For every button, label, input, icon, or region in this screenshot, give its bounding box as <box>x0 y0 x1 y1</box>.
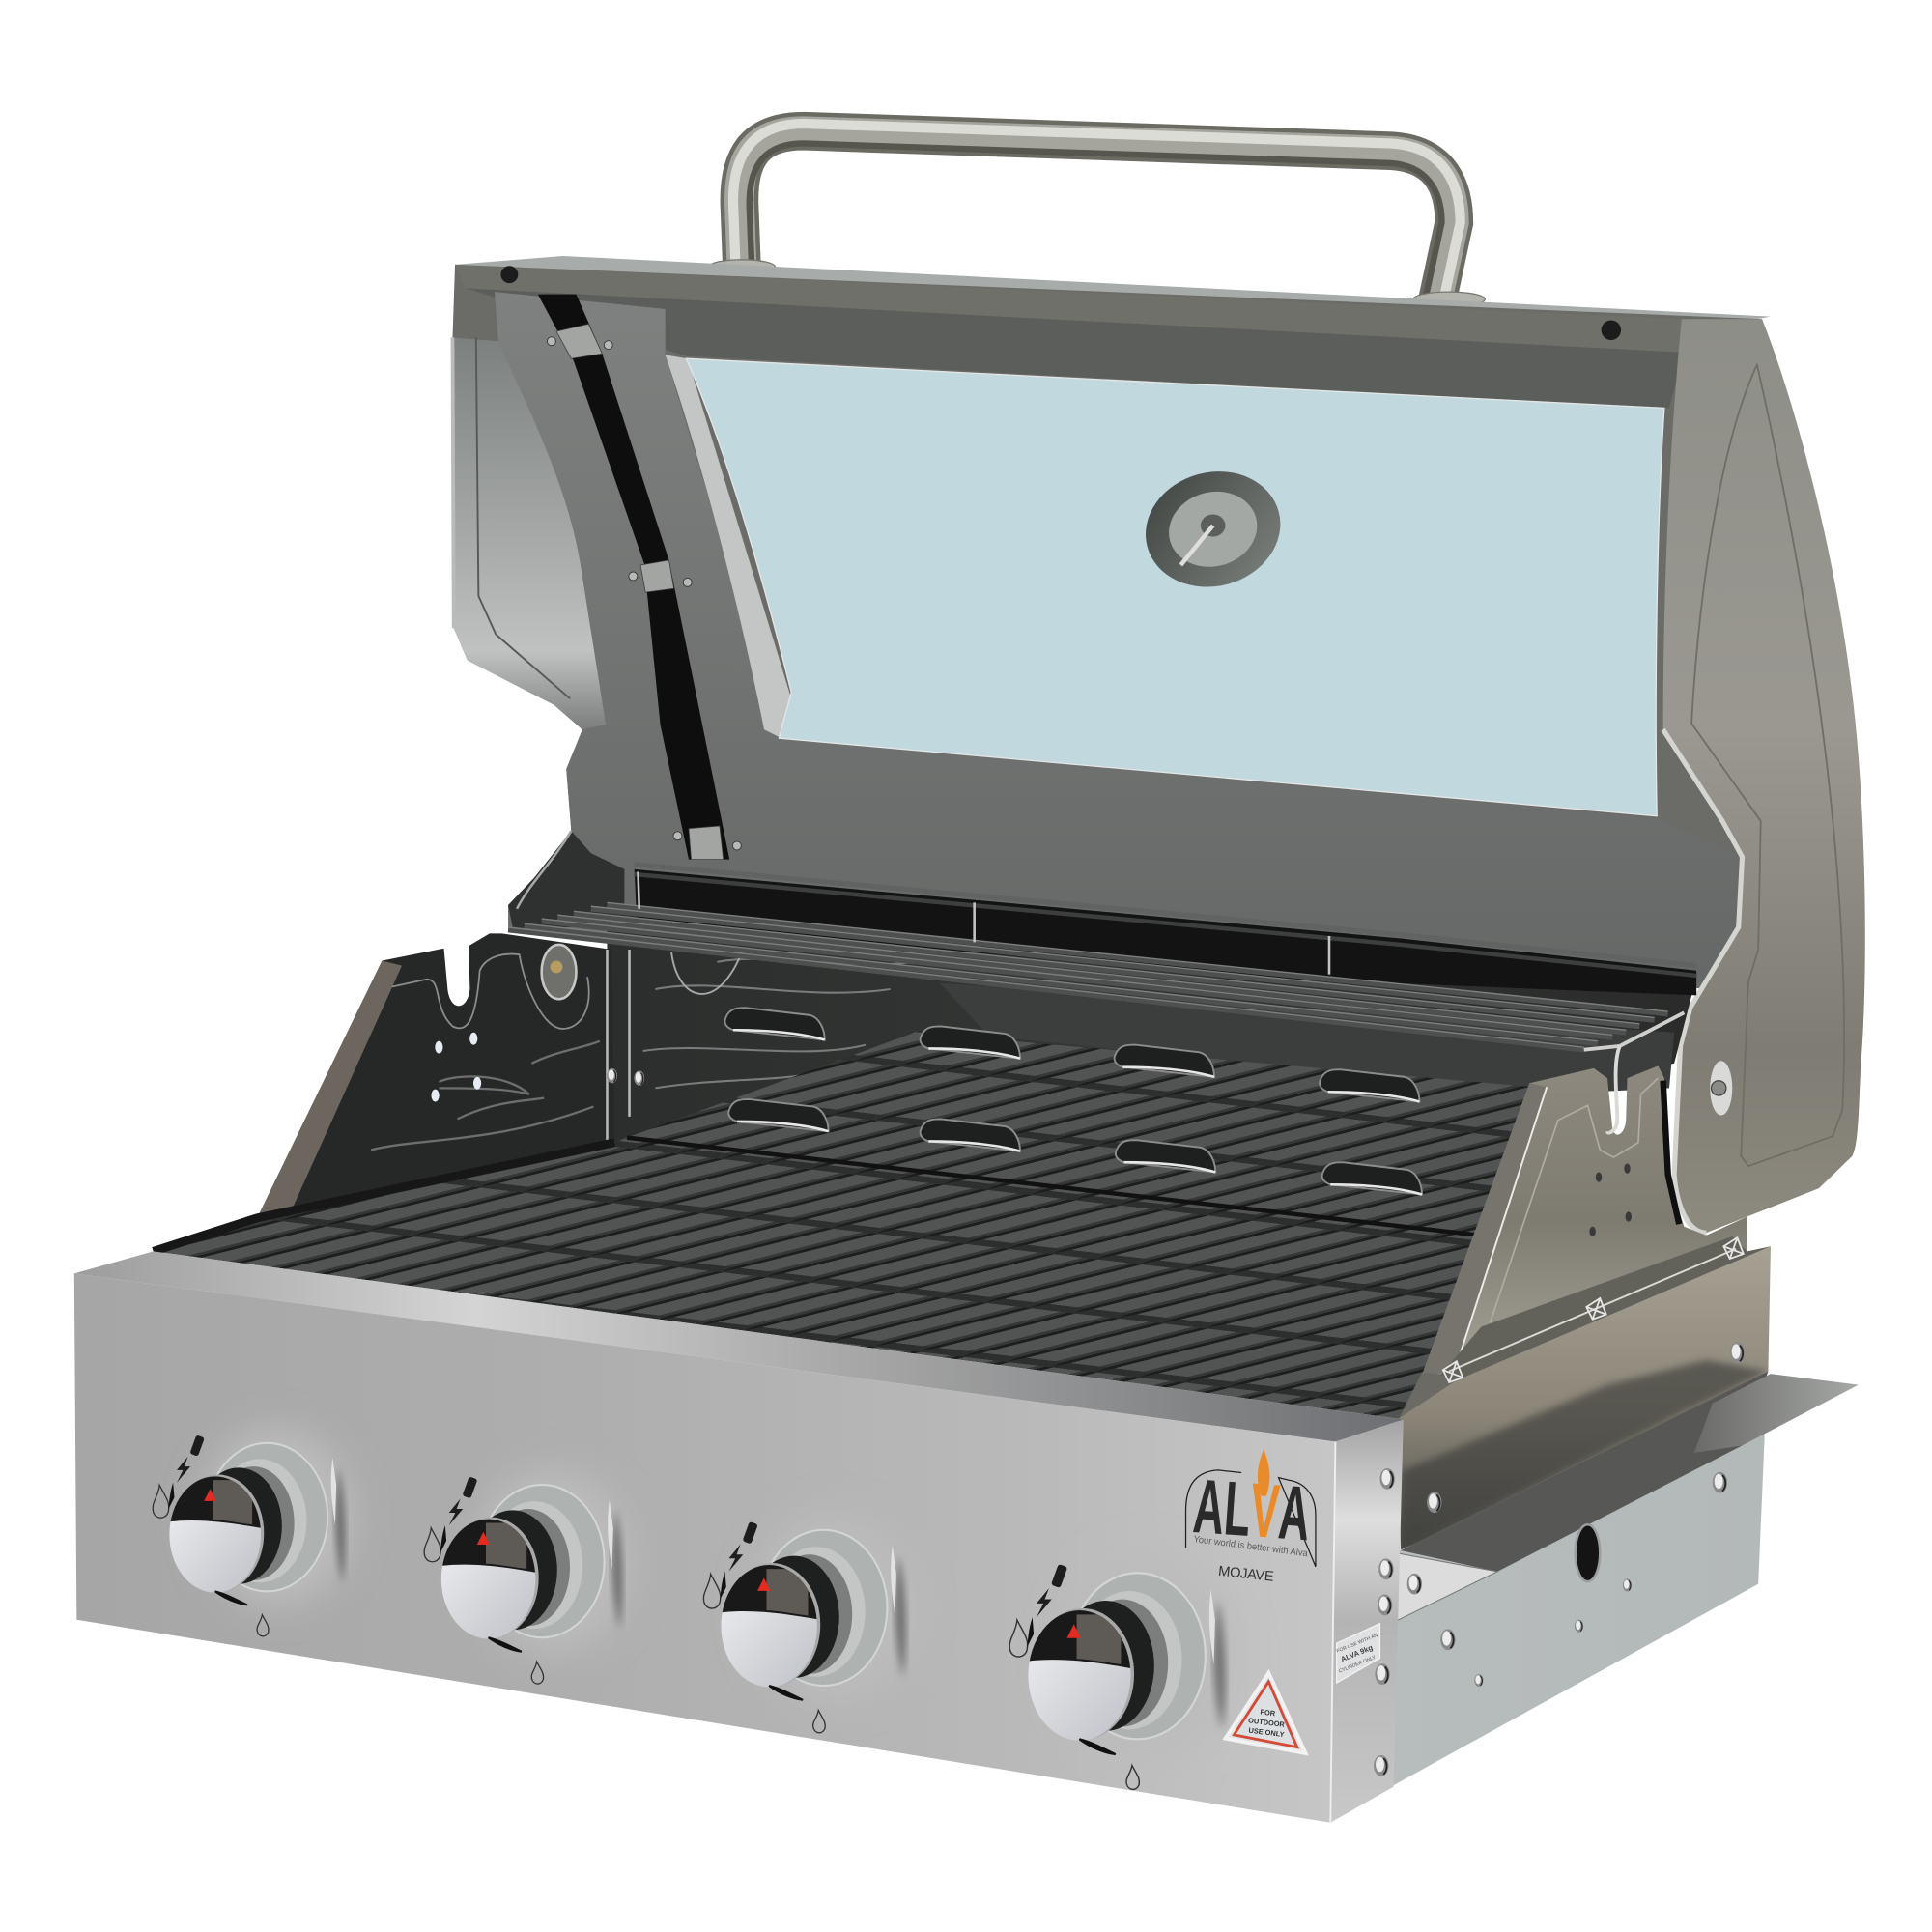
rack posts <box>638 871 1329 975</box>
Alva logo <box>1186 1449 1316 1585</box>
cylinder sticker: CYLINDER ONLY <box>1338 1655 1378 1675</box>
lid body silhouette <box>452 265 1780 989</box>
wall corner filler <box>1397 1373 1465 1422</box>
smoked side panel <box>452 337 606 729</box>
outdoor warning label: USE ONLY <box>1248 1726 1285 1739</box>
rail band <box>1440 1236 1771 1381</box>
firebox <box>154 865 1747 1422</box>
outdoor warning label: OUTDOOR <box>1248 1716 1286 1729</box>
lid handle <box>708 124 1485 306</box>
warming rack rods <box>508 905 1668 1050</box>
right wall holes <box>1589 1163 1632 1236</box>
lid top surface <box>455 256 1771 324</box>
front lip <box>74 1251 1404 1441</box>
panel embossed outline <box>1691 365 1844 1166</box>
flange light plate <box>1396 1553 1497 1621</box>
right wall <box>1422 1065 1747 1378</box>
seam rivets <box>1374 1342 1745 1776</box>
left wall embossing <box>392 954 589 1029</box>
glass window <box>686 358 1664 816</box>
lid top strip <box>465 288 1684 408</box>
flame tamers <box>724 1008 1422 1194</box>
lid bolts <box>500 266 1621 340</box>
wall join brackets <box>607 950 630 1140</box>
knob 1 <box>153 1428 354 1636</box>
open lid <box>452 256 1865 1233</box>
rack support post <box>1607 1046 1620 1133</box>
gas inlet hole <box>1576 1524 1600 1581</box>
logo wordmark: ALVA <box>1191 1463 1313 1556</box>
smoke inner edge <box>476 337 570 698</box>
right wall embossing <box>1490 1078 1658 1323</box>
hinge gap <box>1663 1081 1679 1224</box>
cylinder sticker: FOR USE WITH AN <box>1336 1633 1379 1655</box>
lower left chrome <box>508 831 624 930</box>
rack chrome cross tie <box>1584 1012 1684 1050</box>
burner gauge <box>542 945 576 999</box>
window bevel <box>666 355 791 738</box>
flange underside <box>1401 1372 1768 1572</box>
right lid side panel <box>1663 319 1865 1233</box>
thermometer probe <box>1132 457 1293 602</box>
knob 3 <box>703 1515 915 1733</box>
panel chrome rim <box>1663 729 1743 1233</box>
model name: MOJAVE <box>1217 1564 1275 1585</box>
hinge channel <box>538 295 729 860</box>
warming rack back panel <box>635 869 1696 995</box>
cast grate back section <box>627 1033 1546 1236</box>
side frame <box>495 292 1743 983</box>
cylinder sticker <box>1336 1624 1379 1683</box>
left wall holes <box>431 1033 481 1101</box>
rail tabs <box>1443 1237 1744 1382</box>
left wall bevel <box>257 961 402 1218</box>
knob 4 <box>1009 1556 1235 1789</box>
logo flame <box>1258 1449 1269 1496</box>
outdoor warning label: FOR <box>1260 1707 1276 1718</box>
cylinder sticker: ALVA 9kg <box>1340 1643 1375 1663</box>
handle feet <box>708 260 1485 306</box>
warming rack rail <box>635 865 1696 976</box>
front face <box>74 1273 1335 1823</box>
right wall bevel <box>1422 1083 1547 1375</box>
corner seam panel <box>1330 1419 1404 1823</box>
panel pivot <box>1710 1061 1732 1116</box>
back wall reflections <box>643 959 915 1088</box>
logo frame <box>1186 1470 1316 1567</box>
base body side <box>1391 1236 1859 1787</box>
side lower <box>1391 1397 1765 1787</box>
knob 2 <box>424 1469 631 1684</box>
back wall <box>607 909 1696 1144</box>
tagline: Your world is better with Alva <box>1193 1534 1309 1559</box>
left wall <box>257 933 614 1218</box>
front control panel <box>74 1251 1745 1823</box>
outdoor warning label <box>1225 1673 1306 1753</box>
cast grate front section <box>154 1138 1490 1419</box>
dark fold shadow <box>1401 1360 1768 1550</box>
flange sheet <box>1694 1374 1859 1453</box>
side plate upper <box>1397 1246 1771 1550</box>
hinge screws <box>547 337 741 850</box>
